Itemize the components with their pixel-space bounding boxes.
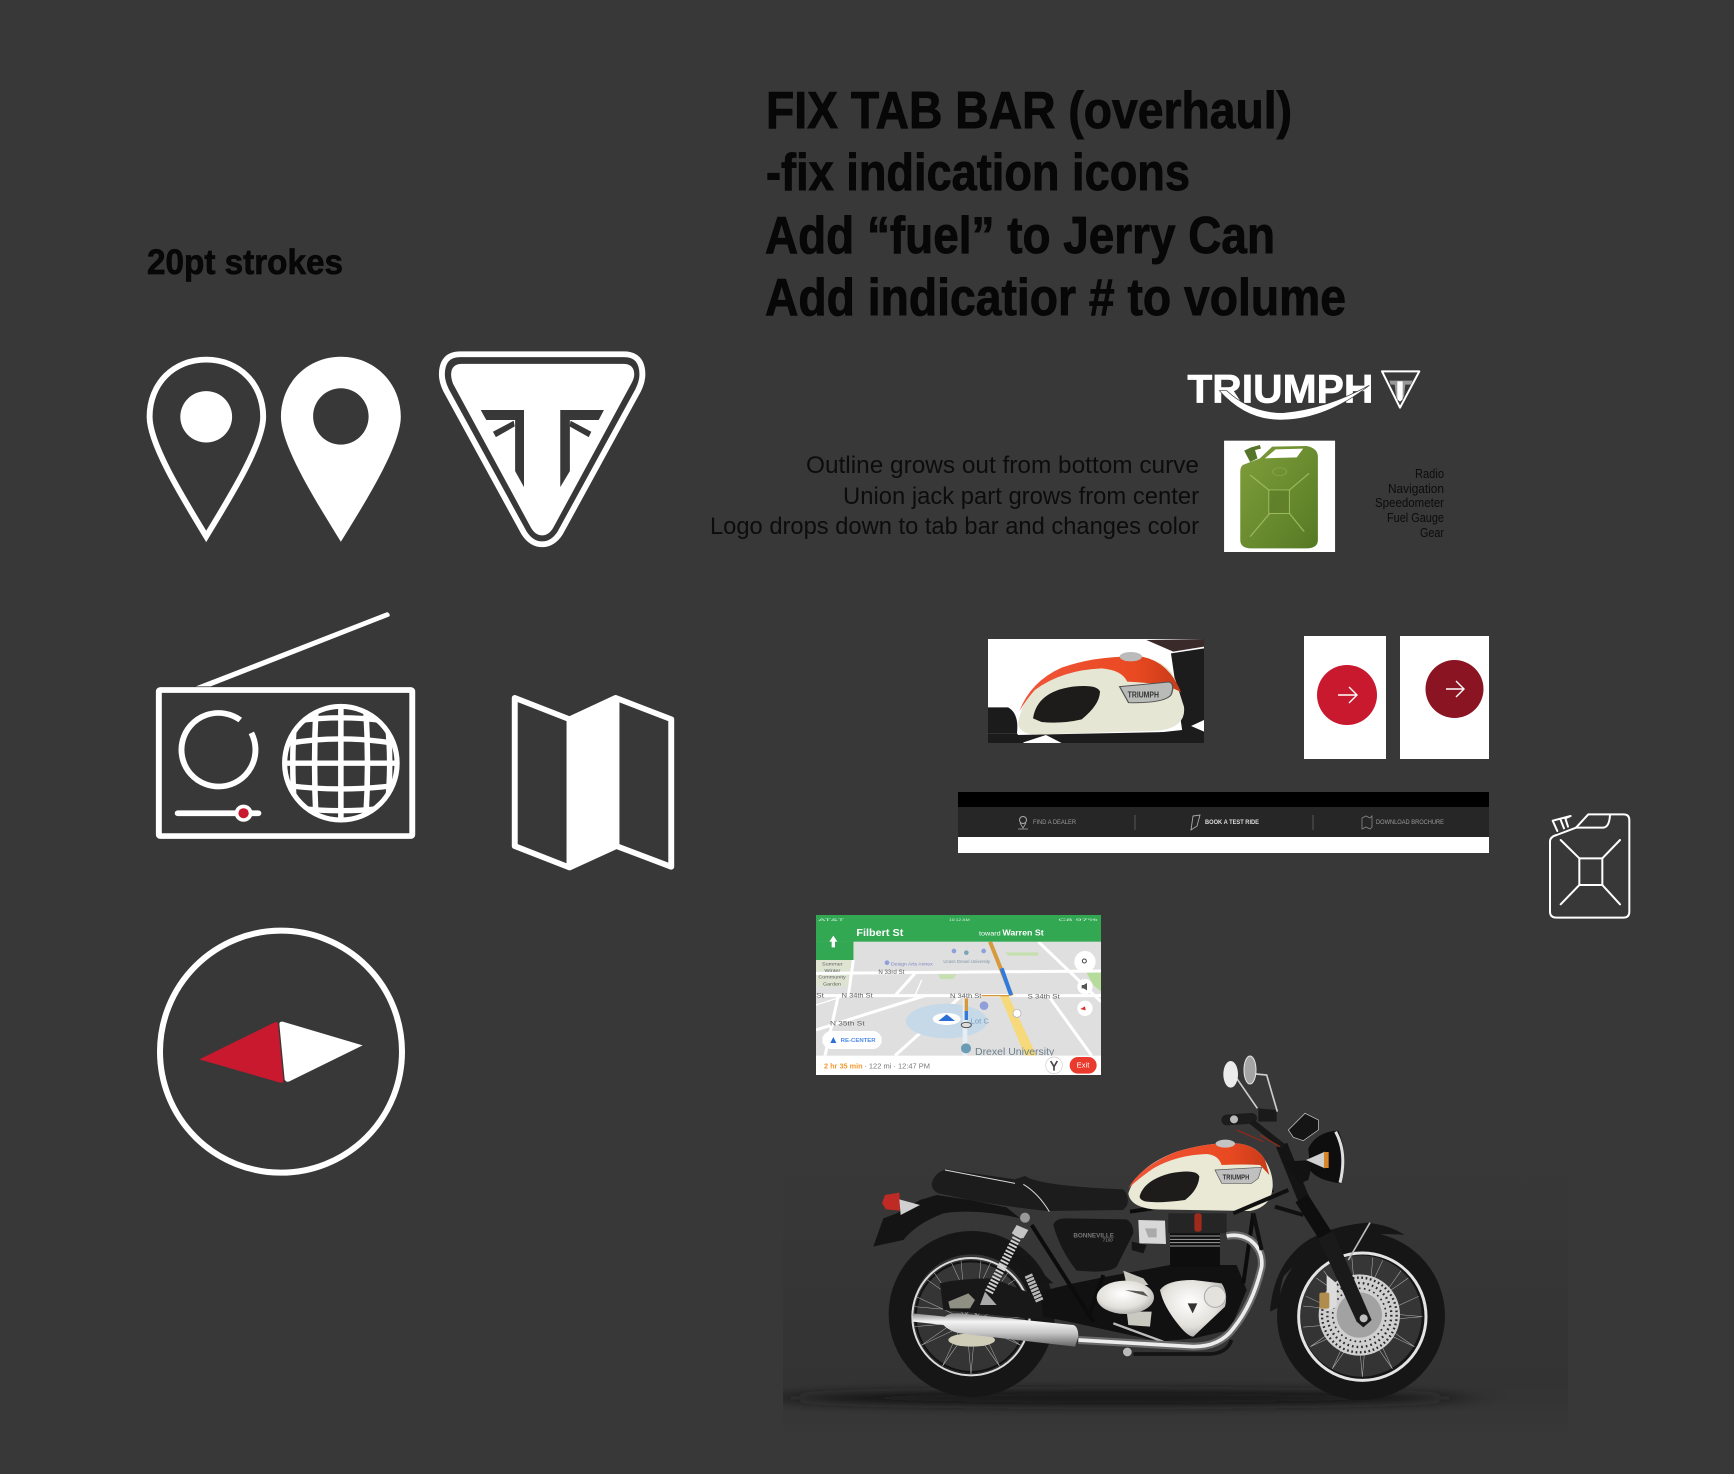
- image: navigation map screenshot: C8 97%: [1058, 917, 1099, 922]
- exhaust: [913, 1235, 1262, 1356]
- image: navigation map screenshot: [816, 915, 1101, 1075]
- tab bar screenshot: BOOK A TEST RIDE: [1205, 820, 1259, 826]
- front wheel: [1289, 1244, 1433, 1388]
- image: navigation map screenshot: S 34th St: [1028, 993, 1060, 1000]
- image: navigation map screenshot: Warren St: [1002, 929, 1044, 938]
- image: navigation map screenshot: 10:12 AM: [949, 917, 970, 922]
- text block: tab list: Fuel Gauge: [1387, 510, 1444, 525]
- button: red arrow default: [1304, 636, 1386, 759]
- image: navigation map screenshot: N 33rd St: [878, 969, 904, 976]
- engine block: [1097, 1213, 1227, 1342]
- image: Triumph Bonneville motorcycle: [783, 1056, 1480, 1412]
- image: navigation map screenshot: Exit: [1077, 1063, 1089, 1070]
- fuel tank: TRIUMPH: [1223, 1174, 1249, 1181]
- image: navigation map screenshot: N 35th St: [830, 1021, 865, 1028]
- title: notes heading: Add indicatior # to volume: [765, 269, 1346, 327]
- image: navigation map screenshot: Design Arts Annex: [891, 961, 933, 966]
- image: navigation map screenshot: Summer: [822, 961, 843, 966]
- front fender: [1270, 1223, 1404, 1312]
- side panel: BONNEVILLE: [1073, 1232, 1115, 1239]
- text block: tab list: Radio: [1415, 466, 1444, 481]
- logo: Triumph wordmark: TRIUMPH: [1187, 368, 1373, 412]
- front half: crop coordinates: [1216, 1056, 1433, 1388]
- button: red arrow pressed: [1400, 636, 1489, 759]
- text block: tab list: [1375, 466, 1445, 540]
- rear wheel: [900, 1243, 1053, 1385]
- heading: 20pt strokes: 20pt strokes: [147, 243, 343, 282]
- image: navigation map screenshot: N 34th St: [842, 992, 873, 999]
- rear mudguard: [873, 1195, 1020, 1247]
- text block: animation notes: [710, 452, 1199, 540]
- floor and shadow: [783, 1383, 1480, 1412]
- icon: jerry can outline: [1550, 814, 1629, 918]
- rear shock: [980, 1213, 1040, 1305]
- image: navigation map screenshot: N 34th St: [950, 993, 982, 1000]
- headlight and indicator: [1283, 1131, 1344, 1183]
- tail light: [882, 1193, 920, 1215]
- title: notes heading: [765, 82, 1346, 327]
- image: fuel tank close-up: [988, 639, 1204, 743]
- image: navigation map screenshot: AT&T: [818, 917, 846, 922]
- side panel: [1053, 1218, 1133, 1272]
- image: green jerry can photo: [1224, 441, 1335, 552]
- text block: animation notes: Outline grows out from bottom curve: [806, 452, 1199, 479]
- text block: tab list: Gear: [1420, 525, 1445, 540]
- image: navigation map screenshot: Garden: [823, 981, 841, 986]
- fuel tank: [1128, 1143, 1273, 1211]
- title: notes heading: FIX TAB BAR (overhaul): [766, 82, 1292, 140]
- fork: [1282, 1145, 1372, 1327]
- image: navigation map screenshot: · 122 mi · 12:47 PM: [864, 1064, 930, 1071]
- instrument pod: [1288, 1113, 1318, 1141]
- image: navigation map screenshot: 2 hr 35 min: [824, 1064, 863, 1071]
- image: navigation map screenshot: Filbert St: [856, 928, 904, 939]
- text block: animation notes: Logo drops down to tab bar and changes color: [710, 513, 1199, 540]
- handlebar and mirrors: [1223, 1056, 1283, 1147]
- frame tubes: [1032, 1190, 1273, 1322]
- icon: folded map: [515, 697, 671, 867]
- icon: Triumph triangle logo: [442, 354, 642, 544]
- image: navigation map screenshot: Lot C: [971, 1017, 990, 1026]
- rear half: crop coordinates: [873, 1143, 1273, 1385]
- side panel: T100: [1103, 1238, 1113, 1243]
- seat: [932, 1169, 1128, 1212]
- image: navigation map screenshot: RE-CENTER: [841, 1038, 876, 1044]
- image: navigation map screenshot: Winter: [824, 968, 841, 973]
- tab bar screenshot: DOWNLOAD BROCHURE: [1376, 820, 1444, 826]
- text block: tab list: Navigation: [1388, 481, 1444, 496]
- text block: tab list: Speedometer: [1375, 495, 1445, 510]
- logo: Triumph wordmark: [1187, 368, 1419, 420]
- icon: outlined location pin: [150, 360, 263, 536]
- image: navigation map screenshot: Ucass Drexel University: [943, 959, 991, 964]
- tab bar screenshot: [958, 792, 1489, 853]
- swingarm and under-seat block: [1040, 1265, 1247, 1342]
- frame front struts: [1233, 1190, 1303, 1250]
- filler cap: [1216, 1140, 1235, 1148]
- title: notes heading: Add “fuel” to Jerry Can: [765, 207, 1275, 265]
- icon: radio: [159, 612, 412, 836]
- icon: compass: [160, 931, 402, 1173]
- image: navigation map screenshot: Community: [818, 975, 846, 980]
- text block: animation notes: Union jack part grows from center: [843, 483, 1199, 510]
- image: fuel tank close-up: TRIUMPH: [1128, 691, 1159, 700]
- image: navigation map screenshot: St: [816, 992, 824, 999]
- title: notes heading: -fix indication icons: [766, 144, 1190, 202]
- icon: filled location pin: [281, 357, 401, 542]
- image: navigation map screenshot: Drexel University: [975, 1047, 1054, 1058]
- tab bar screenshot: FIND A DEALER: [1033, 820, 1077, 826]
- image: navigation map screenshot: toward: [979, 931, 1001, 937]
